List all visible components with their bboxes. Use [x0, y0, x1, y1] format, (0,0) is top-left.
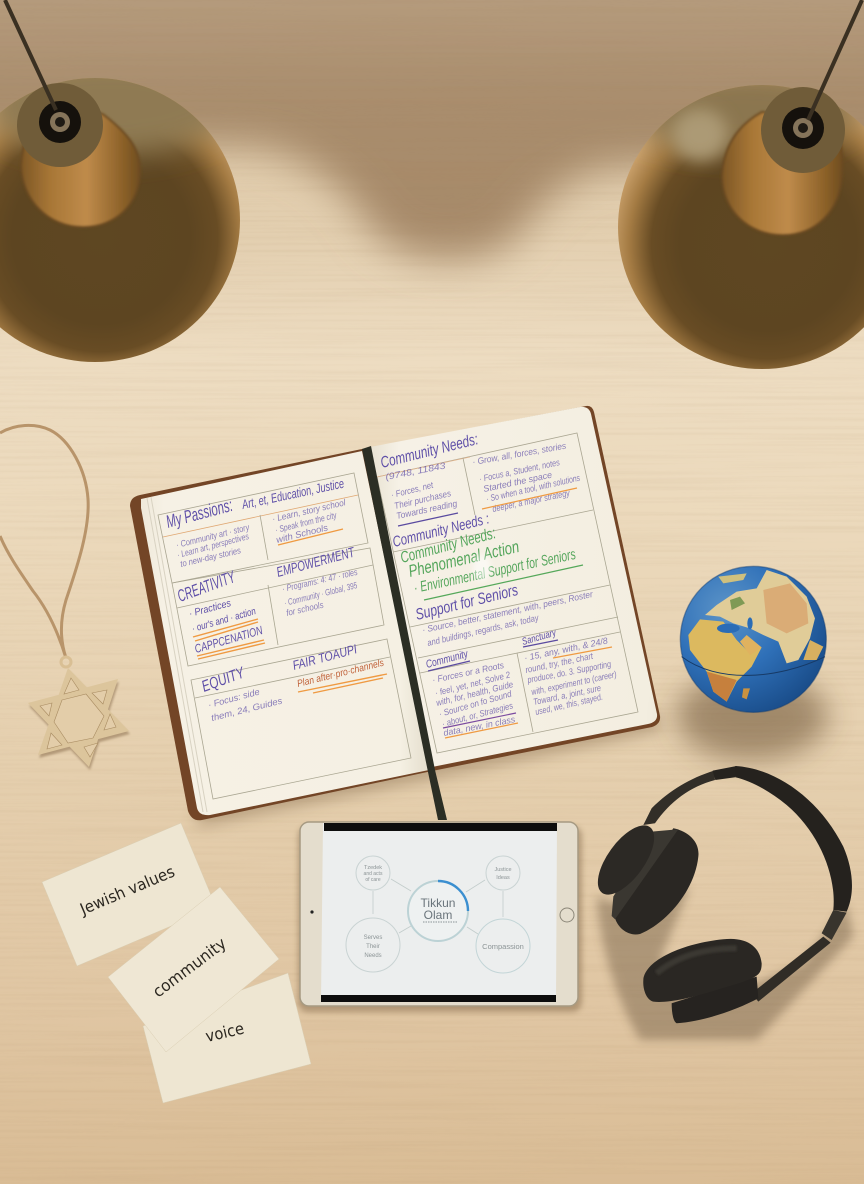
bottom-left node: Needs	[364, 953, 382, 959]
right page handwriting: · Environmental Support for Seniors	[412, 546, 578, 597]
bottom-left node: Serves	[364, 935, 382, 941]
right pendant lamp	[618, 0, 864, 369]
lamp cap	[761, 87, 845, 173]
left page handwriting: · Learn art, perspectives	[176, 531, 250, 560]
spine ribbon bookmark	[362, 446, 447, 820]
upper ear cup	[587, 816, 699, 934]
left page handwriting: · Speak from the city	[274, 510, 338, 535]
left page handwriting: · Programs: 4: 47 · roles	[281, 567, 359, 594]
card: Jewish values: Jewish values	[76, 862, 178, 919]
right page handwriting: · Grow, all, forces, stories	[472, 441, 567, 467]
bottom-left node: Their	[366, 944, 380, 950]
left page handwriting: My Passions:	[164, 495, 235, 532]
star	[28, 668, 129, 767]
headphones	[587, 766, 853, 1040]
center node: Tikkun Olam: Tikkun	[421, 896, 455, 910]
left page handwriting: · Focus: side	[207, 687, 261, 710]
right page handwriting: · about, or, Strategies	[441, 700, 514, 729]
center node: Tikkun Olam: Olam	[424, 908, 452, 922]
right page handwriting: Community	[425, 648, 470, 671]
right page handwriting: with, experiment to (career)	[530, 669, 618, 697]
left page handwriting: FAIR TOAUPI	[291, 641, 359, 673]
lamp cord	[808, 0, 862, 120]
word cards	[42, 823, 311, 1103]
headphones shadow	[597, 887, 853, 1040]
left page handwriting: CAPPCENATION	[193, 623, 264, 656]
card: community	[108, 887, 279, 1052]
left page handwriting	[164, 476, 385, 723]
right page handwriting: · Source, better, statement, with, peers, Roster	[421, 589, 595, 635]
tablet camera	[310, 910, 314, 914]
right page handwriting	[379, 431, 618, 738]
left page handwriting: CREATIVITY	[175, 567, 239, 606]
center node: Tikkun Olam	[408, 881, 468, 941]
star shadow	[29, 671, 130, 770]
left page handwriting: to new-day stories	[179, 545, 242, 569]
lamp collar	[21, 95, 140, 227]
left page handwriting: with Schools	[275, 522, 329, 545]
card: voice: voice	[204, 1019, 246, 1046]
left page handwriting: · Community · Global, 395	[283, 580, 359, 608]
right page handwriting: produce, do. 3. Supporting	[526, 659, 612, 685]
left page handwriting: for schools	[285, 600, 325, 618]
notebook	[130, 406, 662, 826]
left page handwriting: them, 24, Guides	[210, 695, 284, 723]
top-left node: and acts	[364, 871, 383, 877]
card: community: community	[149, 934, 230, 1001]
top-right node: Ideas	[496, 875, 510, 881]
right page handwriting: with, for, health, Guide	[435, 679, 514, 708]
left page handwriting: Art, et, Education, Justice	[240, 476, 345, 512]
lamp shade	[618, 70, 864, 369]
left page handwriting: EQUITY	[200, 664, 248, 696]
top-left node	[356, 856, 390, 890]
right page handwriting: Support for Seniors	[414, 582, 520, 624]
bottom-right node: Compassion	[476, 919, 530, 973]
africa	[688, 619, 762, 702]
globe shadow	[676, 672, 828, 760]
right page handwriting: Started the space	[482, 470, 553, 494]
globe	[676, 566, 828, 760]
bottom-left node	[346, 918, 400, 972]
right page	[370, 407, 657, 767]
top-left node: Tzedek	[364, 865, 382, 871]
left page handwriting: · our's and · action	[191, 606, 258, 635]
top-left node: of care	[365, 877, 381, 883]
right page handwriting: Community Needs :	[391, 510, 491, 551]
right page handwriting: Community Needs:	[399, 525, 498, 567]
lamp shade	[0, 55, 240, 362]
top-right node: Justice	[494, 867, 512, 873]
right page handwriting: · So when a tool, with solutions	[485, 473, 581, 504]
lamp cap	[17, 83, 103, 167]
eurasia	[705, 570, 815, 663]
right page handwriting: Community Needs:	[379, 431, 480, 472]
card: voice	[143, 973, 311, 1103]
left page orange underlines	[193, 529, 387, 693]
pendant cord	[0, 425, 88, 658]
right page handwriting: · Focus a, Student, notes	[478, 457, 561, 484]
right page handwriting: · Forces, net	[390, 480, 435, 500]
left page	[141, 451, 429, 815]
right page handwriting: data, new, in class	[442, 714, 517, 738]
right page handwriting: · feel, yet, net, Solve 2	[434, 670, 511, 698]
left pendant lamp	[0, 0, 240, 362]
right page handwriting: deeper, a major strategy	[491, 488, 571, 514]
lamp collar	[722, 112, 842, 235]
left page handwriting: · Learn, story school	[271, 497, 347, 524]
right page handwriting: · Source on fo Sound	[438, 688, 513, 719]
right page ruled boxes	[377, 433, 638, 753]
lamp cord	[5, 0, 56, 110]
star of David pendant	[0, 425, 130, 770]
right page handwriting: and buildings, regards, ask, today	[426, 612, 540, 648]
right page handwriting: · Forces or a Roots	[431, 660, 505, 685]
left page ruled boxes	[158, 473, 411, 799]
right page handwriting: · 15, any, with, & 24/8	[523, 636, 609, 663]
bottom-right node: Compassion: Compassion	[482, 942, 524, 951]
lower ear cup	[643, 939, 762, 1023]
tablet	[298, 822, 582, 1012]
mind map connectors	[373, 879, 503, 934]
page glare	[473, 555, 491, 581]
tablet home button	[560, 908, 574, 922]
right page handwriting: Towards reading	[395, 498, 458, 521]
headband	[643, 766, 852, 1002]
right page handwriting: Toward, a, joint, sure	[532, 683, 602, 707]
notebook cover	[130, 406, 660, 820]
tablet body	[300, 822, 578, 1006]
right page handwriting: Phenomenal Action	[407, 537, 521, 581]
top-right node	[486, 856, 520, 890]
left page handwriting: EMPOWERMENT	[275, 543, 357, 580]
right page handwriting: Their purchases	[393, 488, 452, 511]
right page handwriting: (9748, 11843	[384, 461, 446, 482]
right page handwriting: Sanctuary	[521, 627, 558, 648]
left page handwriting: · Community art · story	[175, 522, 251, 550]
notebook shadow	[196, 712, 662, 826]
tablet shadow	[298, 826, 582, 1012]
left page handwriting: Plan after·pro·channels	[296, 658, 385, 690]
left page handwriting: · Practices	[188, 598, 232, 620]
card: Jewish values	[42, 823, 216, 966]
globe sphere	[680, 566, 826, 712]
tablet screen	[321, 823, 557, 1002]
right page handwriting: used, we, this, stayed.	[534, 692, 604, 717]
right page underlines	[398, 488, 612, 738]
right page handwriting: round, try, the, chart	[524, 651, 594, 675]
